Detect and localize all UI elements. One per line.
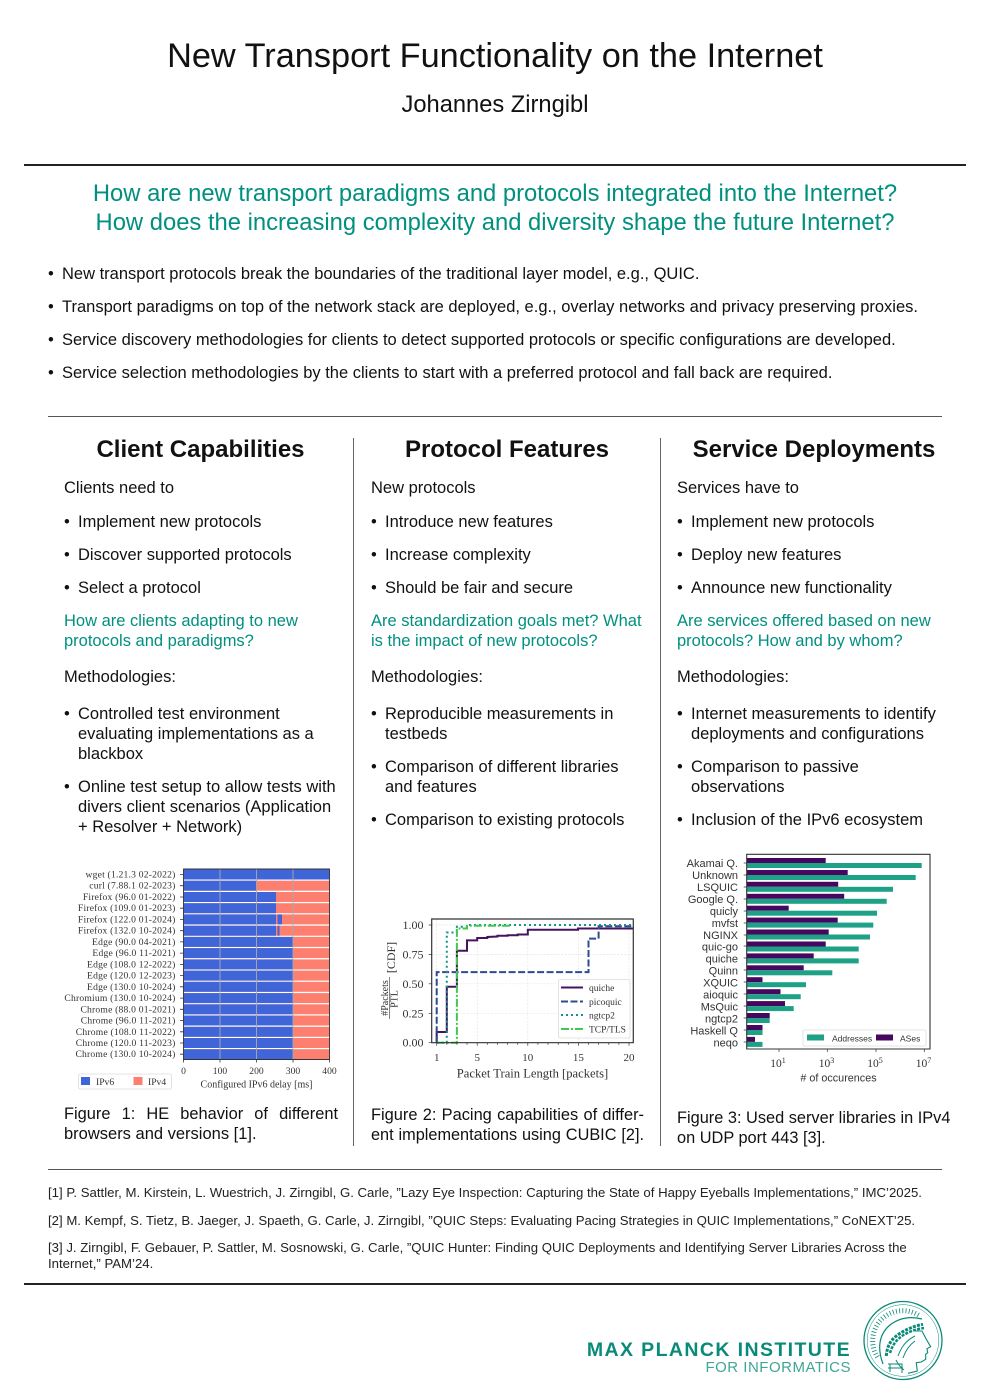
list: methodologies: evaluating implementations as a	[78, 725, 314, 743]
list: methodologies: observations	[691, 778, 785, 796]
list: services: Implement new protocols	[691, 513, 874, 531]
caption: figure 3: Figure 3: Used server libraries in IPv4	[677, 1109, 950, 1127]
logo wordmark: MAX PLANCK INSTITUTE	[587, 1339, 851, 1361]
question: How are clients adapting to new	[64, 612, 298, 630]
logo wordmark	[587, 1339, 851, 1376]
chart: pacing CDF: ngtcp2	[589, 1012, 615, 1022]
chart: pacing CDF: 5	[474, 1052, 480, 1064]
chart: pacing CDF: [CDF]	[384, 942, 398, 973]
list: methodologies: Inclusion of the IPv6 ecosystem	[691, 811, 923, 829]
chart: server libraries: 10	[819, 1058, 830, 1070]
list: needs: Implement new protocols	[78, 513, 261, 531]
chart: happy eyeballs stacked bars: Firefox (132.0 10-2024)	[78, 926, 176, 937]
chart: happy eyeballs stacked bars: Firefox (109.0 01-2023)	[78, 903, 176, 914]
chart: pacing CDF: quiche	[589, 984, 614, 994]
text: methodologies: Methodologies:	[677, 668, 789, 686]
list: features	[372, 513, 573, 597]
chart: server libraries: Addresses	[832, 1034, 872, 1044]
question: protocols and paradigms?	[64, 632, 254, 650]
author: Johannes Zirngibl	[402, 92, 588, 118]
list: needs: Discover supported protocols	[78, 546, 292, 564]
heading: Service Deployments	[693, 436, 935, 463]
list: methodologies: + Resolver + Network)	[78, 818, 242, 836]
panel: protocol features	[371, 436, 642, 829]
chart: happy eyeballs stacked bars: Chrome (88.0 01-2021)	[80, 1004, 176, 1015]
chart: server libraries: neqo	[714, 1038, 738, 1050]
intro bullet list: Service discovery methodologies for clients to detect supported protocols or specific configurations are developed.	[62, 331, 896, 349]
chart: server libraries: 10	[867, 1058, 879, 1070]
list: methodologies	[64, 705, 336, 836]
question	[371, 612, 642, 650]
chart: server libraries: quic-go	[702, 942, 738, 954]
intro bullet list	[48, 265, 918, 382]
question: protocols? How and by whom?	[677, 632, 903, 650]
references: [3] J. Zirngibl, F. Gebauer, P. Sattler, M. Sosnowski, G. Carle, ”QUIC Hunter: Finding QUIC Deployments and Identifying Server Libraries Across the	[48, 1240, 907, 1255]
chart: server libraries: ngtcp2	[705, 1014, 738, 1026]
chart: server libraries: 5	[879, 1056, 883, 1065]
chart: pacing CDF: 0.25	[402, 1006, 424, 1020]
logo seal: Minerva head	[863, 1300, 943, 1380]
chart: happy eyeballs stacked bars: Edge (96.0 11-2021)	[92, 948, 176, 959]
question: is the impact of new protocols?	[371, 632, 598, 650]
panel: service deployments	[677, 436, 936, 829]
question	[677, 612, 931, 650]
chart: pacing CDF: TCP/TLS	[589, 1026, 626, 1036]
list: features: Introduce new features	[385, 513, 553, 531]
chart: happy eyeballs stacked bars: Chrome (96.0 11-2021)	[81, 1016, 176, 1026]
question: Are services offered based on new	[677, 612, 931, 630]
list: features: Should be fair and secure	[385, 579, 573, 597]
chart: pacing CDF: 0.00	[402, 1036, 424, 1050]
chart: server libraries: Haskell Q	[690, 1026, 738, 1038]
chart: server libraries: # of occurences	[800, 1072, 877, 1084]
research questions	[93, 180, 897, 236]
heading: Protocol Features	[405, 436, 609, 463]
chart: happy eyeballs stacked bars: Firefox (96.0 01-2022)	[83, 892, 176, 903]
chart: happy eyeballs stacked bars: 200	[249, 1066, 264, 1077]
chart: happy eyeballs stacked bars: Edge (108.0 12-2022)	[87, 959, 176, 970]
chart: happy eyeballs stacked bars: 300	[286, 1066, 300, 1077]
chart: server libraries: ASes	[900, 1034, 920, 1044]
chart: server libraries: 1	[782, 1056, 786, 1065]
chart: happy eyeballs stacked bars: Chrome (120.0 11-2023)	[76, 1038, 176, 1049]
chart: pacing CDF: 20	[624, 1052, 635, 1064]
list: methodologies: and features	[385, 778, 477, 796]
caption: figure 2	[371, 1106, 644, 1144]
chart: server libraries: mvfst	[712, 918, 738, 930]
references: Internet,” PAM’24.	[48, 1256, 153, 1271]
references: [2] M. Kempf, S. Tietz, B. Jaeger, J. Spaeth, G. Carle, J. Zirngibl, ”QUIC Steps: Evaluating Pacing Strategies in QUIC Implementations,” CoNEXT’25.	[48, 1213, 915, 1228]
list: methodologies: Online test setup to allow tests with	[78, 778, 336, 796]
chart: happy eyeballs stacked bars: wget (1.21.3 02-2022)	[86, 870, 176, 880]
research questions: How are new transport paradigms and protocols integrated into the Internet?	[93, 180, 897, 206]
chart: happy eyeballs stacked bars: 0	[181, 1066, 186, 1077]
text: new protocols: New protocols	[371, 479, 476, 497]
references	[48, 1185, 922, 1271]
chart: pacing CDF: 10	[522, 1052, 534, 1064]
chart: happy eyeballs stacked bars: Edge (130.0 10-2024)	[87, 982, 176, 993]
list: methodologies: Comparison of different libraries	[385, 758, 619, 776]
chart: happy eyeballs stacked bars: Edge (120.0 12-2023)	[87, 971, 176, 982]
chart: server libraries: XQUIC	[703, 978, 738, 990]
caption: figure 1: browsers and versions [1].	[64, 1125, 257, 1143]
panel: client capabilities	[64, 436, 336, 836]
list: methodologies: Comparison to passive	[691, 758, 859, 776]
list: services: Deploy new features	[691, 546, 841, 564]
chart: pacing CDF: #Packets	[380, 980, 391, 1016]
chart: happy eyeballs stacked bars: Edge (90.0 04-2021)	[92, 937, 176, 948]
question	[64, 612, 298, 650]
caption: figure 1: Figure 1: HE behavior of different	[64, 1105, 338, 1123]
list: methodologies: blackbox	[78, 745, 143, 763]
question: Are standardization goals met? What	[371, 612, 642, 630]
chart: pacing CDF: picoquic	[589, 998, 622, 1008]
text: methodologies: Methodologies:	[371, 668, 483, 686]
intro bullet list: New transport protocols break the boundaries of the traditional layer model, e.g., QUIC.	[62, 265, 699, 283]
chart: server libraries: 10	[770, 1058, 782, 1070]
chart: happy eyeballs stacked bars: 400	[322, 1066, 337, 1077]
caption: figure 3	[677, 1109, 950, 1147]
chart: server libraries: quicly	[710, 906, 738, 918]
chart: server libraries: LSQUIC	[697, 882, 738, 894]
chart: happy eyeballs stacked bars: IPv6	[96, 1077, 114, 1088]
chart: server libraries: NGINX	[703, 930, 739, 942]
text: methodologies: Methodologies:	[64, 668, 176, 686]
chart: server libraries: aioquic	[703, 990, 738, 1002]
heading: Client Capabilities	[96, 436, 305, 463]
text: services have to: Services have to	[677, 479, 799, 497]
text: clients need to: Clients need to	[64, 479, 174, 497]
chart: server libraries: quiche	[706, 954, 738, 966]
caption: figure 2: ent implementations using CUBIC [2].	[371, 1126, 644, 1144]
logo wordmark: FOR INFORMATICS	[705, 1359, 851, 1376]
list: features: Increase complexity	[385, 546, 531, 564]
chart: pacing CDF: 0.75	[402, 947, 424, 961]
list: methodologies	[372, 705, 624, 829]
chart: happy eyeballs stacked bars: curl (7.88.1 02-2023)	[89, 881, 176, 892]
list: methodologies: Reproducible measurements in	[385, 705, 613, 723]
research questions: How does the increasing complexity and diversity shape the future Internet?	[96, 209, 894, 236]
list: methodologies: deployments and configurations	[691, 725, 924, 743]
title: New Transport Functionality on the Internet	[167, 37, 823, 75]
list: methodologies: Comparison to existing protocols	[385, 811, 624, 829]
chart: happy eyeballs stacked bars: Chrome (130.0 10-2024)	[75, 1049, 176, 1060]
chart: pacing CDF: 15	[573, 1052, 584, 1064]
intro bullet list: Transport paradigms on top of the network stack are deployed, e.g., overlay networks and privacy preserving proxies.	[62, 298, 918, 316]
chart: server libraries: MsQuic	[701, 1002, 738, 1014]
list: services: Announce new functionality	[691, 579, 892, 597]
chart: server libraries: Quinn	[709, 966, 738, 978]
chart: pacing CDF: 0.50	[402, 977, 424, 991]
chart: server libraries: 3	[830, 1056, 834, 1065]
chart: happy eyeballs stacked bars: Chrome (108.0 11-2022)	[76, 1027, 176, 1038]
chart: server libraries: 7	[927, 1056, 931, 1065]
chart: happy eyeballs stacked bars: Chromium (130.0 10-2024)	[64, 993, 176, 1004]
chart: pacing CDF: Packet Train Length [packets]	[457, 1066, 608, 1080]
chart: pacing CDF: PTL	[390, 990, 400, 1008]
chart: pacing CDF: 1	[434, 1052, 439, 1064]
list: methodologies: Internet measurements to identify	[691, 705, 936, 723]
intro bullet list: Service selection methodologies by the clients to start with a preferred protocol and fall back are required.	[62, 364, 832, 382]
chart: server libraries: 10	[916, 1058, 927, 1070]
list: methodologies: Controlled test environment	[78, 705, 280, 723]
references: [1] P. Sattler, M. Kirstein, L. Wuestrich, J. Zirngibl, G. Carle, ”Lazy Eye Inspection: Capturing the State of Happy Eyeballs Implementations,” IMC’2025.	[48, 1185, 922, 1200]
chart: happy eyeballs stacked bars: Firefox (122.0 01-2024)	[78, 914, 176, 925]
list: services	[678, 513, 892, 597]
list: needs: Select a protocol	[78, 579, 201, 597]
list: methodologies	[678, 705, 936, 829]
caption: figure 2: Figure 2: Pacing capabilities of differ-	[371, 1106, 644, 1124]
chart: happy eyeballs stacked bars: 100	[213, 1066, 227, 1077]
chart: pacing CDF: 1.00	[402, 918, 424, 932]
chart: server libraries: Google Q.	[688, 894, 738, 906]
caption: figure 1	[64, 1105, 338, 1143]
list: methodologies: testbeds	[385, 725, 447, 743]
chart: happy eyeballs stacked bars: Configured IPv6 delay [ms]	[201, 1080, 312, 1090]
chart: happy eyeballs stacked bars: IPv4	[148, 1077, 166, 1088]
list: needs	[64, 513, 292, 597]
chart: server libraries: Unknown	[692, 870, 738, 882]
caption: figure 3: on UDP port 443 [3].	[677, 1129, 826, 1147]
chart: server libraries: Akamai Q.	[687, 858, 738, 870]
list: methodologies: divers client scenarios (Application	[78, 798, 331, 816]
